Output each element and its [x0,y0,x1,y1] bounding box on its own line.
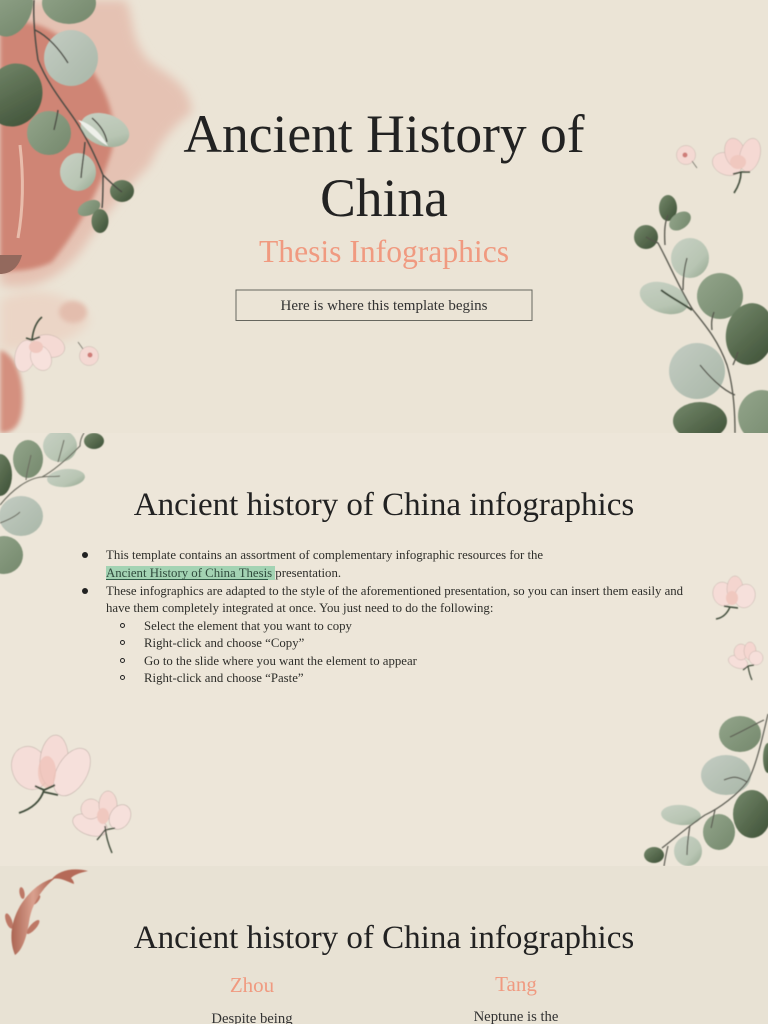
flower: slide 2 right large [710,576,759,619]
bullet list [82,548,683,685]
subtitle: Thesis Infographics [259,234,509,269]
watercolor wash: top-left red stain [0,0,192,433]
branch: slide 1 right eucalyptus [634,195,768,442]
template note: Here is where this template begins [280,298,488,314]
sub-bullet [120,623,125,628]
flower: slide 1 left small [78,342,98,366]
sub-bullet [120,658,125,663]
title: China [320,168,448,228]
text: line 2: Ancient History of China Thesis presentation. [106,566,341,580]
flower: slide 1 right small [676,146,697,168]
flower: slide 1 left large [12,317,67,374]
heading: slide 2: Ancient history of China infographics [134,487,634,523]
flower: slide 2 right small [727,642,763,680]
icon: koi fish [3,869,88,955]
highlight behind link text [106,566,275,580]
column heading: Tang: Tang [495,972,537,996]
flower: slide 2 bottom-left large [6,734,98,813]
slide 3 background [0,866,768,1024]
text: step 4: Right-click and choose “Paste” [144,671,304,685]
column heading: Zhou: Zhou [230,973,274,997]
branch: slide 2 right eucalyptus [644,714,768,866]
sub-bullet [120,640,125,645]
link underline [106,578,268,580]
bullet [82,552,88,558]
flower: slide 2 bottom-left small [70,791,135,853]
title box border [236,290,532,320]
sub-bullet [120,675,125,680]
slide 1 background [0,0,768,433]
bullet [82,588,88,594]
text: step 3: Go to the slide where you want the element to appear [144,654,417,668]
text: line 3: These infographics are adapted to the style of the aforementioned presentation, so you can insert them easily and [106,584,683,598]
slide 2 background [0,433,768,866]
text: step 2: Right-click and choose “Copy” [144,636,304,650]
text: line 4: have them completely integrated at once. You just need to do the following: [106,601,493,615]
branch: slide 2 top-left eucalyptus [0,430,104,574]
text: line 1: This template contains an assortment of complementary infographic resources for the [106,548,543,562]
text: step 1: Select the element that you want to copy [144,619,352,633]
title: Ancient History of [183,104,585,164]
branch: top-left eucalyptus [0,0,134,233]
title [183,104,585,228]
flower: slide 1 right large [709,136,764,193]
heading: slide 3: Ancient history of China infographics [134,920,634,956]
